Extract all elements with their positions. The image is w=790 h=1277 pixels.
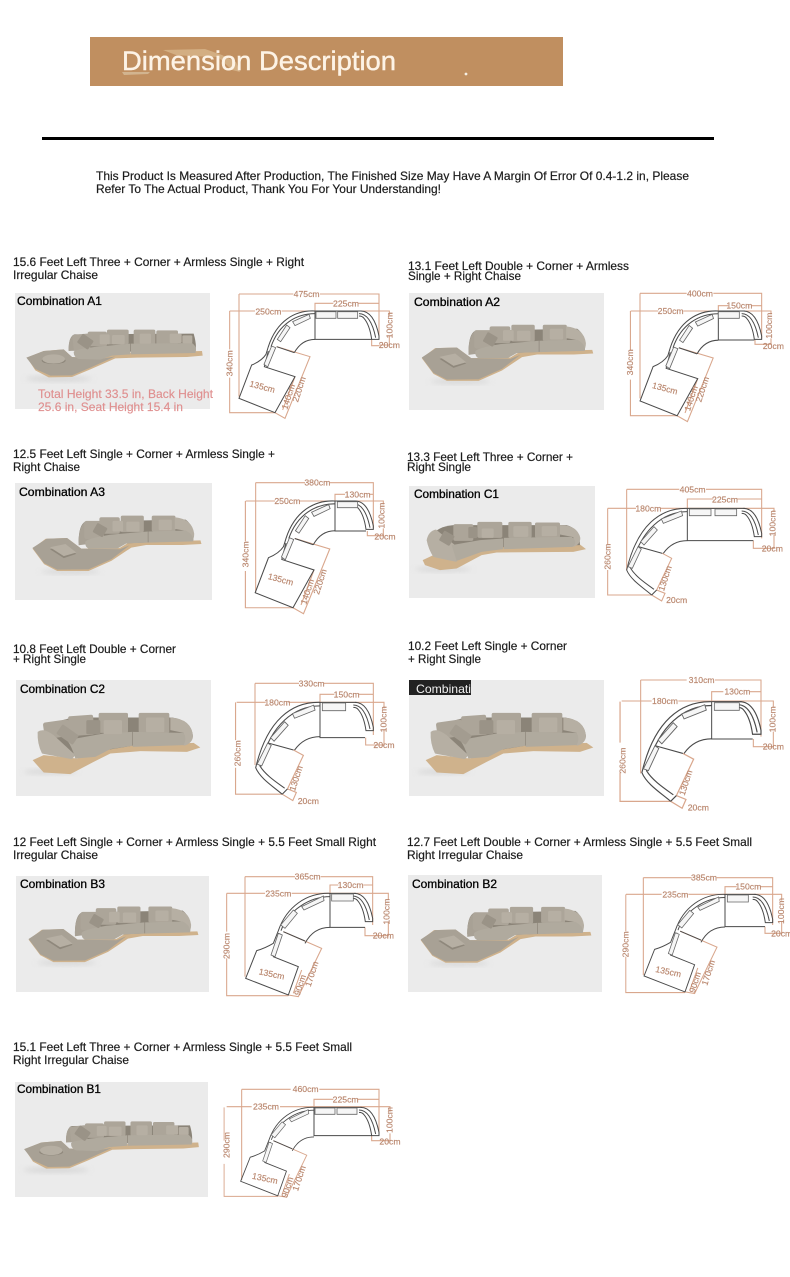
dimension diagram: A1: 225cm xyxy=(333,299,359,309)
dimension diagram: A2: 400cm xyxy=(687,288,713,298)
product photo: C1: Combination C1 xyxy=(414,487,499,501)
dimension diagram: C1: 130cm xyxy=(656,564,674,592)
product photo: B1 xyxy=(15,1082,208,1197)
dimension diagram: A2: 340cm xyxy=(625,349,635,375)
dimension diagram: 10.2 feet: 20cm xyxy=(688,803,709,813)
dimension diagram: C1: 180cm xyxy=(635,503,661,513)
heading: B2 xyxy=(407,835,752,862)
dimension diagram: A2 xyxy=(625,288,784,422)
heading: C1: Right Single xyxy=(407,460,471,474)
panel: Combination A3 xyxy=(13,447,396,614)
dimension diagram: C2: 20cm xyxy=(373,740,395,750)
heading: B1: Right Irregular Chaise xyxy=(13,1053,129,1067)
dimension diagram: A1: 475cm xyxy=(294,289,320,299)
dimension diagram: B1: 235cm xyxy=(253,1102,279,1112)
product photo: B3 xyxy=(16,876,209,992)
heading: A1: Irregular Chaise xyxy=(13,268,98,282)
panel: Combination B2 xyxy=(407,835,790,994)
product photo: A3: Combination A3 xyxy=(19,485,105,499)
panel: Combination C3 (10.2 feet) xyxy=(408,639,784,813)
dimension diagram: C2: 330cm xyxy=(299,678,325,688)
dimension diagram: B2: 290cm xyxy=(621,931,631,957)
panel: Combination B1 xyxy=(13,1040,401,1199)
dimension diagram: C1: 100cm xyxy=(768,510,778,536)
dimension diagram: B1: 90cm xyxy=(279,1176,295,1199)
dimension diagram: B3: 290cm xyxy=(222,933,232,959)
dimension diagram: 10.2 feet: 20cm xyxy=(763,742,784,752)
dimension diagram: A2: 135cm xyxy=(651,380,679,397)
panel: Combination A2 xyxy=(408,259,784,422)
dimension diagram: A3: 340cm xyxy=(241,541,251,567)
heading: A2 xyxy=(408,259,629,283)
heading: A3 xyxy=(13,447,275,474)
dimension diagram: B2: 170cm xyxy=(700,959,717,987)
dimension diagram: B3: 170cm xyxy=(303,960,320,988)
dimension diagram: A1: 20cm xyxy=(379,340,400,350)
dimension diagram: C2: 150cm xyxy=(334,689,360,699)
title banner: Dimension Description: Dimension Description xyxy=(122,46,396,76)
dimension diagram: B2: 135cm xyxy=(655,964,682,979)
heading: B3 xyxy=(13,835,377,862)
dimension diagram: A2: 100cm xyxy=(764,313,774,339)
dimension diagram: A1: 340cm xyxy=(224,350,234,376)
dimension diagram: B1 xyxy=(222,1084,401,1199)
product photo: A2 xyxy=(409,293,604,410)
dimension diagram: A3: 20cm xyxy=(374,532,396,542)
dimension diagram: C2: 130cm xyxy=(287,764,305,792)
dimension diagram: A3: 380cm xyxy=(304,478,330,488)
heading: C2: 10.8 Feet Left Double + Corner xyxy=(13,642,176,656)
dimension diagram: A2: 20cm xyxy=(763,341,784,351)
heading: 10.2 feet: + Right Single xyxy=(408,652,481,666)
dimension diagram: A3: 130cm xyxy=(345,489,371,499)
dimension diagram: C1: 225cm xyxy=(712,495,738,505)
heading: A2: 13.1 Feet Left Double + Corner + Armless xyxy=(408,259,629,273)
title banner: Dimension Description xyxy=(90,37,563,86)
dimension diagram: B2: 90cm xyxy=(687,971,703,994)
product photo: 10.2 feet xyxy=(409,680,604,796)
height note: Total Height 33.5 in, Back Height xyxy=(38,387,214,401)
panel: Combination A1 xyxy=(13,255,400,418)
dimension diagram: B3: 20cm xyxy=(373,931,394,941)
dimension diagram: A1: 220cm xyxy=(290,375,308,403)
heading: C1 xyxy=(407,450,573,474)
dimension diagram: A1: 140cm xyxy=(280,383,297,411)
dimension diagram: C1: 405cm xyxy=(680,485,706,495)
dimension diagram: A3 xyxy=(241,478,396,614)
dimension diagram: B3: 90cm xyxy=(292,973,308,997)
dimension diagram: B3: 235cm xyxy=(265,888,291,898)
product photo: C2 xyxy=(16,680,211,796)
product photo: A1 xyxy=(15,293,210,409)
product photo: B1: Combination B1 xyxy=(17,1082,101,1096)
measurement disclaimer text: This Product Is Measured After Production, The Finished Size May Have A Margin Of Error Of 0.4-1.2 in, Please xyxy=(96,169,689,183)
heading: A2: Single + Right Chaise xyxy=(408,269,521,283)
heading: C1: 13.3 Feet Left Three + Corner + xyxy=(407,450,573,464)
product photo: A2: Combination A2 xyxy=(414,295,500,309)
dimension diagram: C2 xyxy=(232,678,395,806)
dimension diagram: B2: 385cm xyxy=(691,873,717,883)
heading: 10.2 feet xyxy=(408,639,567,666)
dimension diagram: A1 xyxy=(224,289,400,418)
product photo: B2: Combination B2 xyxy=(412,877,497,891)
heading: C2: + Right Single xyxy=(13,652,86,666)
heading: B2: Right Irregular Chaise xyxy=(407,848,523,862)
product photo: C2: Combination C2 xyxy=(20,682,105,696)
product photo: A3 xyxy=(15,483,212,600)
dimension diagram: A1: 250cm xyxy=(255,306,281,316)
measurement disclaimer text xyxy=(96,169,689,196)
heading: A3: Right Chaise xyxy=(13,460,80,474)
heading: B2: 12.7 Feet Left Double + Corner + Armless Single + 5.5 Feet Small xyxy=(407,835,752,849)
dimension diagram: A3: 140cm xyxy=(299,578,316,606)
product photo: C1 xyxy=(409,486,595,598)
dimension diagram: A1: 135cm xyxy=(248,378,276,395)
heading: B3: Irregular Chaise xyxy=(13,848,98,862)
dimension diagram: 10.2 feet: 130cm xyxy=(724,687,750,697)
heading: 10.2 feet: 10.2 Feet Left Single + Corner xyxy=(408,639,567,653)
product photo: B3: Combination B3 xyxy=(20,877,105,891)
dimension diagram: B1: 100cm xyxy=(384,1107,394,1133)
dimension diagram: C1 xyxy=(603,485,783,605)
dimension diagram: B2 xyxy=(621,873,790,994)
dimension diagram: A1: 100cm xyxy=(384,312,394,338)
dimension diagram: B3 xyxy=(222,872,394,997)
dimension diagram: C2: 180cm xyxy=(264,697,290,707)
dimension diagram: B1: 170cm xyxy=(290,1164,308,1192)
dimension diagram: 10.2 feet: 310cm xyxy=(689,675,715,685)
product photo: 10.2 feet: Combinati xyxy=(416,682,471,696)
dimension diagram: 10.2 feet: 260cm xyxy=(618,748,628,774)
dimension diagram: A3: 100cm xyxy=(377,503,387,529)
dimension diagram: A3: 250cm xyxy=(274,496,300,506)
dimension diagram: B1: 460cm xyxy=(293,1084,319,1094)
dimension diagram: B1: 225cm xyxy=(333,1094,359,1104)
dimension diagram: A3: 135cm xyxy=(267,571,295,588)
dimension diagram: B3: 130cm xyxy=(338,880,364,890)
dimension diagram: C1: 20cm xyxy=(762,544,783,554)
panel: Combination C1 xyxy=(407,450,783,605)
heading: A3: 12.5 Feet Left Single + Corner + Armless Single + xyxy=(13,447,275,461)
dimension diagram: C2: 100cm xyxy=(378,706,388,732)
dimension diagram: 10.2 feet: 130cm xyxy=(677,769,694,797)
dimension diagram: A3: 220cm xyxy=(311,568,329,596)
dimension diagram: C2: 260cm xyxy=(232,740,242,766)
dimension diagram: 10.2 feet: 180cm xyxy=(652,696,678,706)
dimension diagram: A2: 220cm xyxy=(694,375,711,403)
dimension diagram: 10.2 feet: 100cm xyxy=(767,706,777,732)
heading: B3: 12 Feet Left Single + Corner + Armless Single + 5.5 Feet Small Right xyxy=(13,835,377,849)
dimension diagram: B3: 100cm xyxy=(382,899,392,925)
height note xyxy=(38,387,214,414)
dimension diagram: B1: 135cm xyxy=(251,1171,279,1186)
dimension diagram: C2: 20cm xyxy=(298,796,319,806)
heading: C2 xyxy=(13,642,176,666)
dimension diagram: A2: 150cm xyxy=(726,301,752,311)
heading: B1: 15.1 Feet Left Three + Corner + Armless Single + 5.5 Feet Small xyxy=(13,1040,352,1054)
dimension diagram: B2: 235cm xyxy=(662,889,688,899)
dimension diagram: B3: 365cm xyxy=(295,872,321,882)
measurement disclaimer text: Refer To The Actual Product, Thank You For Your Understanding! xyxy=(96,182,441,196)
dimension diagram: A2: 140cm xyxy=(682,384,700,412)
dimension diagram: 10.2 feet xyxy=(618,675,784,813)
dimension diagram: C1: 260cm xyxy=(603,544,613,570)
dimension diagram: B2: 150cm xyxy=(735,882,761,892)
height note: 25.6 in, Seat Height 15.4 in xyxy=(38,400,183,414)
panel: Combination B3 xyxy=(13,835,394,997)
dimension diagram: B2: 100cm xyxy=(776,898,786,924)
heading: B1 xyxy=(13,1040,352,1067)
heading: A1: 15.6 Feet Left Three + Corner + Armless Single + Right xyxy=(13,255,305,269)
heading: A1 xyxy=(13,255,305,282)
dimension diagram: B1: 20cm xyxy=(379,1137,401,1147)
product photo: A1: Combination A1 xyxy=(17,294,102,308)
dimension diagram: B1: 290cm xyxy=(222,1132,232,1158)
dimension diagram: B3: 135cm xyxy=(258,966,285,982)
dimension diagram: A2: 250cm xyxy=(658,306,684,316)
panel: Combination C2 xyxy=(13,642,395,806)
product photo: B2 xyxy=(408,875,602,992)
dimension diagram: C1: 20cm xyxy=(666,595,687,605)
